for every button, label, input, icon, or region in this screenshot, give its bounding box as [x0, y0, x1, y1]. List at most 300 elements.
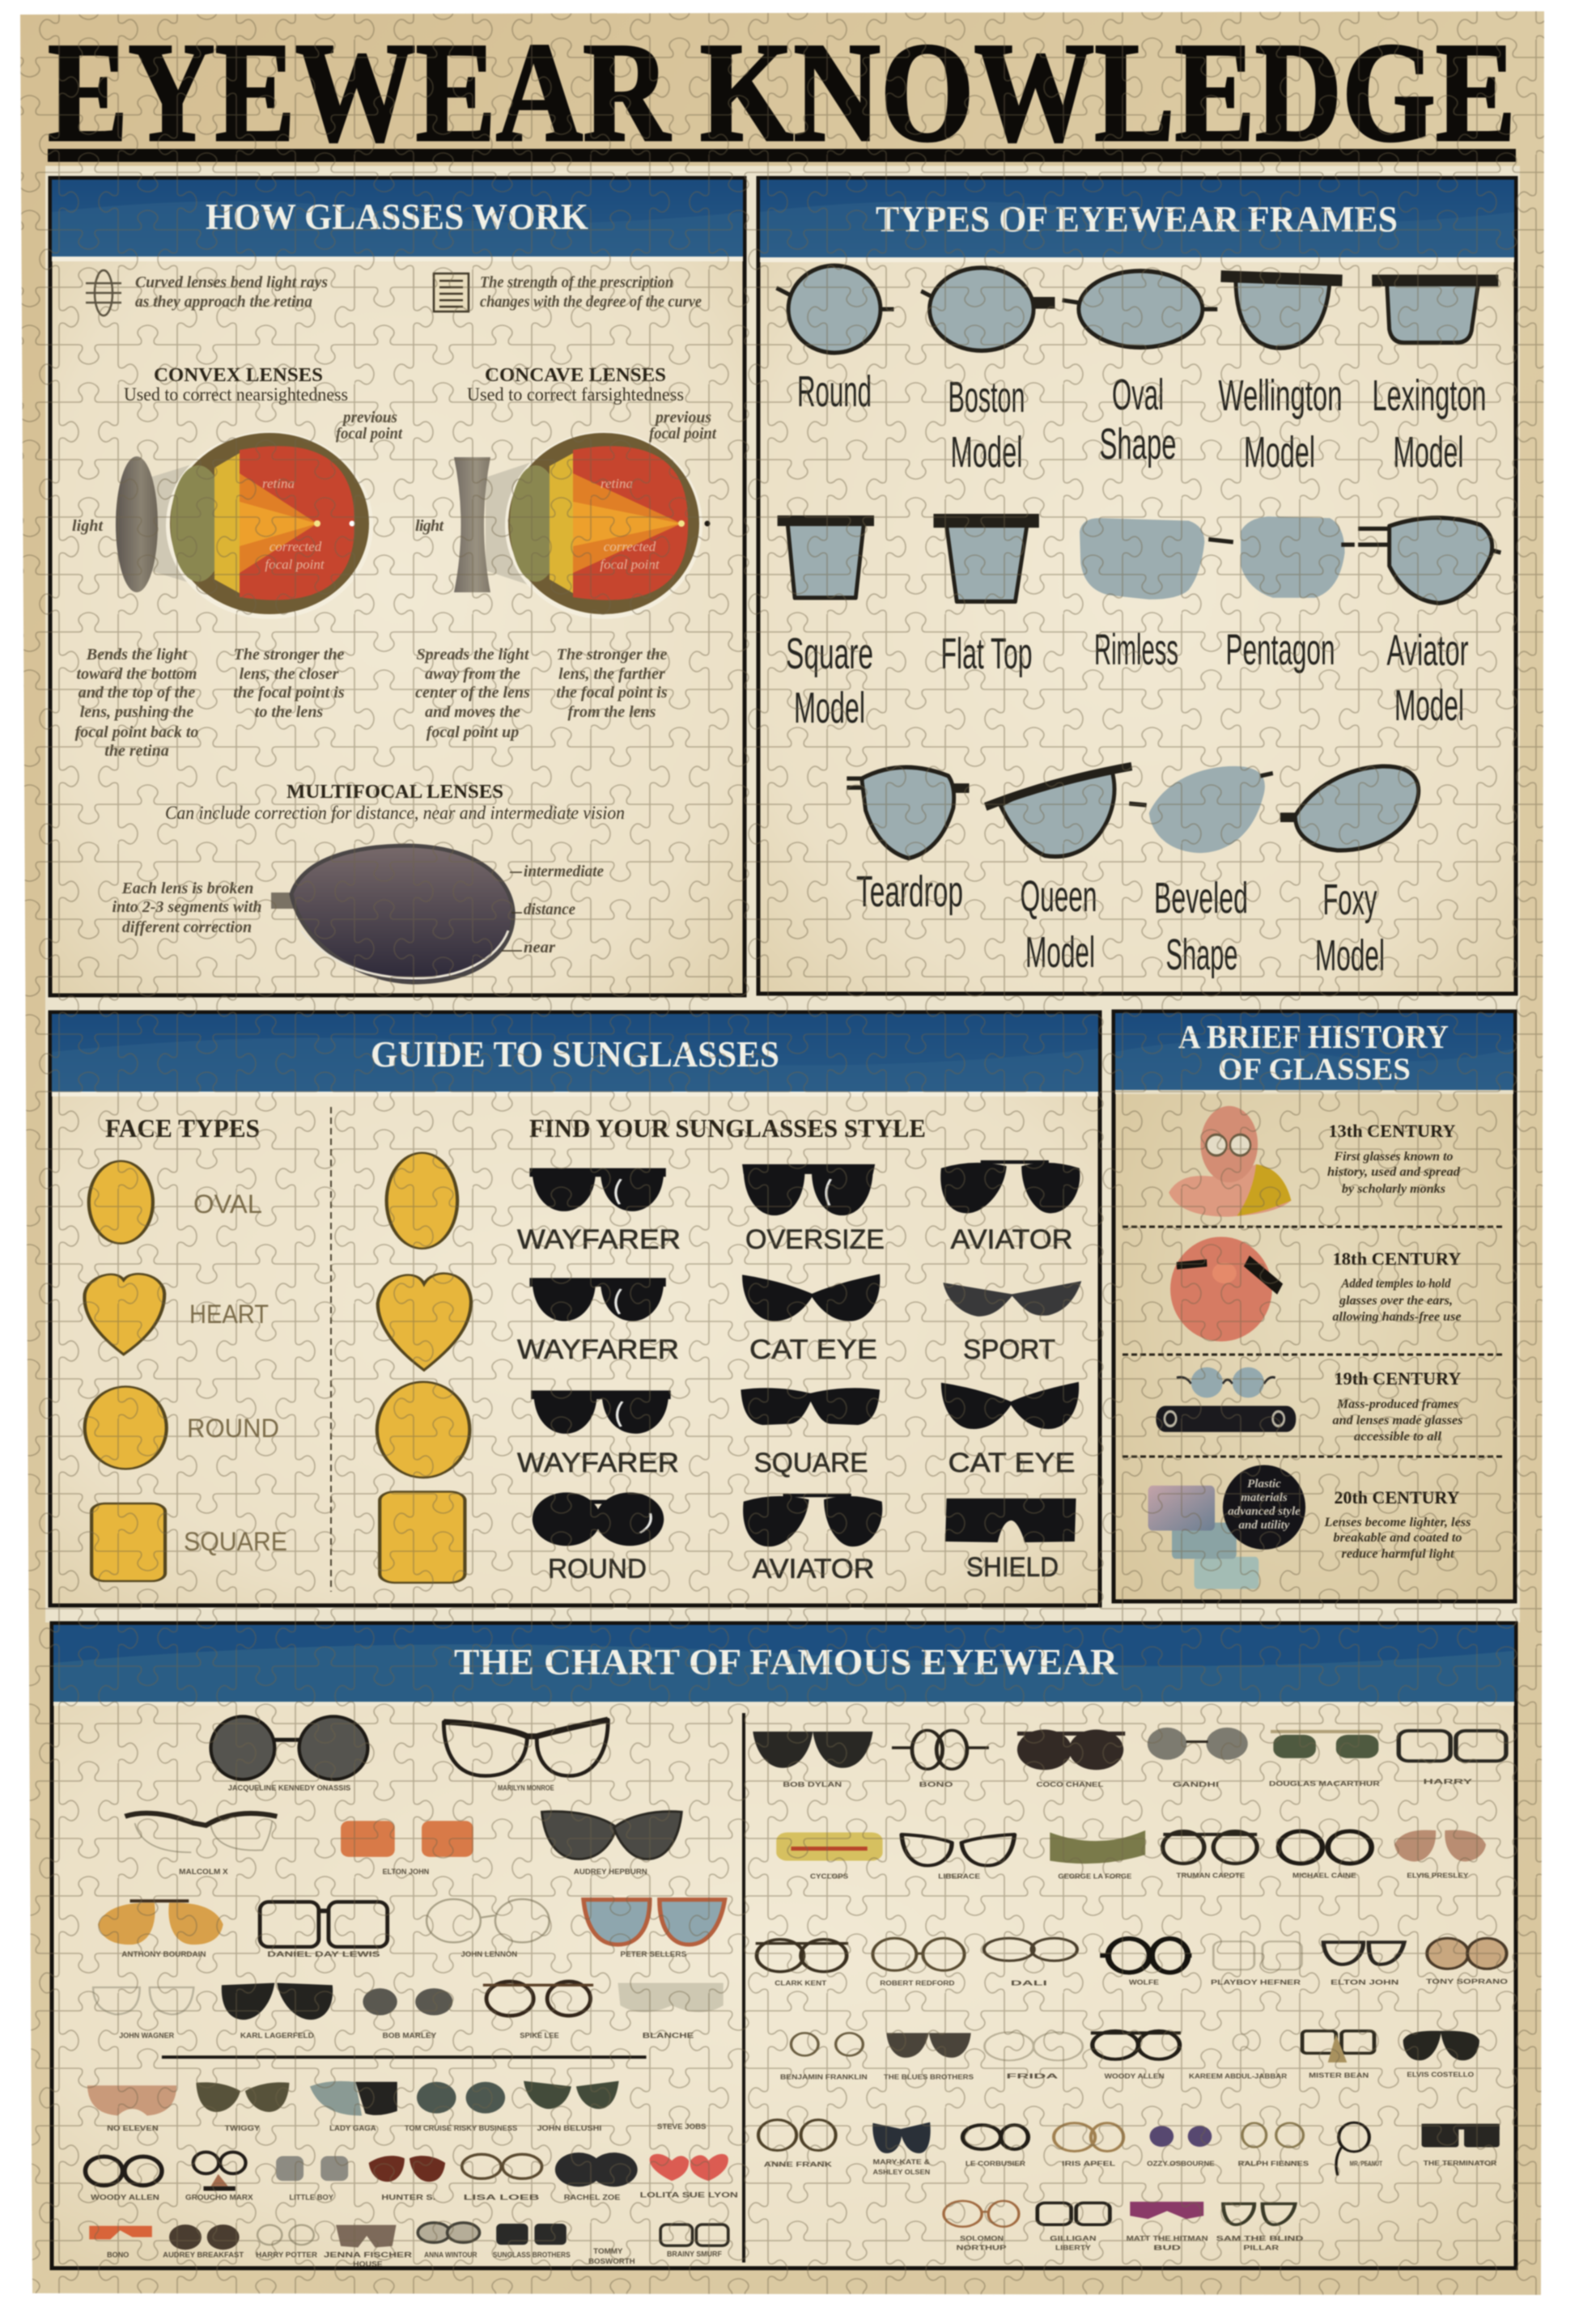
header: types of frames [760, 180, 1514, 262]
label: amber tinted: TONY SOPRANO [1426, 1978, 1508, 1986]
eyewear: leopard: JENNA FISCHER [324, 2251, 412, 2260]
19th century text: Mass-produced frames [1336, 1397, 1458, 1411]
convex lenses heading [124, 365, 348, 405]
eyewear: dark gradient round [555, 2152, 638, 2202]
eyewear: dark red aviator [369, 2156, 445, 2202]
diagram: concave lens eye: previous [654, 409, 711, 426]
19th century text [1332, 1368, 1463, 1444]
20th century text [1323, 1487, 1471, 1561]
header: brief history [1115, 1013, 1513, 1094]
frame names: Model [1394, 681, 1464, 730]
eyewear: frames with nose [1302, 2031, 1374, 2080]
frame: pentagon [1241, 516, 1355, 598]
eyewear: brown round A: CLARK KENT [775, 1980, 827, 1987]
eyewear: gray round: GANDHI [1173, 1781, 1219, 1789]
eyewear: small round copper: NORTHUP [956, 2245, 1007, 2252]
eyewear: olive rectangles [1216, 2203, 1303, 2252]
eyewear: purple dots: OZZY OSBOURNE [1147, 2161, 1215, 2168]
text: concave explanation 2: from the lens [568, 703, 656, 721]
20th century text: Lenses become lighter, less [1323, 1516, 1471, 1529]
frame names: Oval [1112, 371, 1164, 419]
eyewear: black rectangles small: LIBERTY [1055, 2245, 1091, 2252]
frames drawn in one coordinate group [776, 265, 1500, 859]
frame names: Flat Top [940, 630, 1033, 678]
eyewear: small round copper: SOLOMON [960, 2235, 1004, 2243]
eyewear: thick round: MICHAEL CAINE [1292, 1872, 1356, 1880]
eyewear: small dark round [363, 1988, 452, 2040]
eyewear: dark brown: AUDREY BREAKFAST [163, 2251, 244, 2260]
eyewear: dark bat [872, 2123, 931, 2176]
eyewear: green clubmaster [524, 2081, 619, 2133]
eyewear: dark red aviator: HUNTER S. [381, 2194, 435, 2202]
frame names: Round [797, 367, 872, 416]
eyewear: magenta [1127, 2202, 1208, 2252]
header: guide to sunglasses: GUIDE TO SUNGLASSES [371, 1033, 779, 1075]
eyewear: gray round [1148, 1728, 1248, 1789]
eyewear: browline: MALCOLM X [179, 1868, 228, 1877]
diagram: concave lens eye: focal point [600, 557, 660, 572]
style labels: SQUARE [754, 1448, 868, 1478]
eyewear: browline [125, 1813, 277, 1877]
18th century text: Added temples to hold [1341, 1277, 1451, 1291]
diagram: convex lens eye: previous [342, 409, 397, 426]
20th century text: 20th CENTURY [1334, 1487, 1460, 1508]
eyewear: flat ovals [984, 1938, 1077, 1987]
eyewear: thick round black: WOODY ALLEN [91, 2194, 159, 2202]
13th century text [1327, 1121, 1461, 1196]
large face: heart [378, 1274, 471, 1370]
eyewear: orange square lenses: ELTON JOHN [383, 1868, 429, 1877]
eyewear: tan aviators: ANTHONY BOURDAIN [121, 1951, 206, 1959]
eyewear: thick black round [1100, 1939, 1191, 1987]
eyewear: mottled and dark: LADY GAGA [329, 2124, 376, 2133]
eyewear: clear cat: LIBERACE [938, 1873, 980, 1881]
eyewear: leopard: HOUSE [353, 2260, 383, 2269]
frame names: Lexington [1373, 371, 1486, 420]
style labels: WAYFARER [517, 1334, 679, 1365]
eyewear: yellow visor: CYCLOPS [810, 1873, 848, 1881]
eyewear: dark square [884, 2033, 974, 2081]
eyewear: tan round small [1238, 2123, 1309, 2168]
panel: guide to sunglasses [50, 1012, 1100, 1605]
frame names: Queen [1020, 872, 1097, 921]
eyewear: round black: WOODY ALLEN [1105, 2073, 1165, 2080]
eyewear: round black [1091, 2031, 1181, 2080]
eyewear: black rectangles small: GILLIGAN [1050, 2235, 1097, 2243]
text: multifocal note: Each lens is broken [121, 880, 253, 897]
diagram: concave lens eye: focal point [649, 425, 717, 443]
eyewear: pink tan [87, 2085, 176, 2133]
eyewear: dark cat small: ELTON JOHN [1330, 1979, 1398, 1987]
eyewear: olive band: GEORGE LA FORGE [1058, 1873, 1132, 1881]
eyewear: round tortoise: SPIKE LEE [520, 2032, 559, 2040]
frame names: Square [786, 630, 873, 678]
eyewear: tan round small: RALPH FIENNES [1238, 2161, 1309, 2168]
frame names: Wellington [1219, 371, 1342, 420]
eyewear: thin clear [462, 2154, 542, 2202]
eyewear: brown round C: ANNE FRANK [764, 2161, 833, 2169]
small face: square [91, 1503, 165, 1581]
diagram: convex lens eye: light [72, 517, 104, 535]
frame: foxy [1280, 766, 1419, 850]
face labels: OVAL [193, 1190, 262, 1219]
13th century text: by scholarly monks [1342, 1182, 1445, 1196]
eyewear: thick round black [85, 2156, 162, 2202]
frame: aviator [1358, 518, 1500, 603]
diagram: convex lens eye: focal point [265, 557, 325, 572]
eyewear: large square frames: DANIEL DAY LEWIS [267, 1951, 380, 1959]
text: convex explanation 1: the retina [104, 742, 169, 760]
sunglasses: square [741, 1388, 880, 1425]
circle callout text [1228, 1478, 1301, 1532]
eyewear: green clubmaster: JOHN BELUSHI [537, 2124, 602, 2133]
eyewear: faint tiny: KAREEM ABDUL-JABBAR [1189, 2073, 1288, 2080]
frame names: Model [1244, 428, 1315, 477]
multifocal lenses heading: Can include correction for distance, near and intermediate vision [165, 803, 625, 823]
frame names: Beveled [1154, 874, 1248, 922]
eyewear: dark gradient round: RACHEL ZOE [564, 2194, 621, 2202]
19th century text: 19th CENTURY [1334, 1368, 1462, 1389]
eyewear: faint clear: FRIDA [1006, 2073, 1058, 2080]
label: invisible frames: STEVE JOBS [657, 2123, 707, 2131]
eyewear: round thin [1163, 1831, 1257, 1880]
eyewear: monocle [1336, 2123, 1383, 2175]
frame names: Teardrop [856, 867, 963, 916]
circle callout text: advanced style [1228, 1505, 1301, 1518]
eyewear: faint rectangles [1211, 1941, 1301, 1987]
eyewear: olive wayfarer [196, 2082, 289, 2133]
face labels: SQUARE [184, 1527, 287, 1556]
shapes and sunglasses drawing group [84, 1153, 1081, 1583]
illustration: monk with glasses [1169, 1106, 1291, 1217]
eyewear: amber rim [1054, 2123, 1123, 2168]
eyewear: faint rims [93, 1987, 193, 2014]
style labels: AVIATOR [753, 1554, 874, 1584]
text: convex explanation 1: toward the bottom [77, 665, 197, 683]
concave lenses heading [467, 365, 684, 405]
eyewear: large round sunglasses [211, 1716, 367, 1792]
frame names: Rimless [1094, 626, 1178, 674]
eyewear: orange small: BONO [107, 2251, 129, 2260]
eyewear: small round [963, 2125, 1028, 2168]
diagram: convex lens eye: corrected [269, 539, 322, 554]
frame names: Aviator [1387, 626, 1469, 675]
eyewear: groucho: GROUCHO MARX [185, 2194, 253, 2202]
eyewear: faint tiny [1189, 2034, 1288, 2080]
frame: queen [986, 766, 1131, 857]
eyewear: gray framed [418, 2223, 480, 2242]
eyewear: leopard [324, 2225, 412, 2269]
circle callout text: and utility [1239, 1519, 1290, 1532]
13th century text: First glasses known to [1334, 1150, 1454, 1164]
style labels: OVERSIZE [745, 1224, 885, 1255]
eyewear: faint small round [256, 2225, 317, 2260]
eyewear: black small square [493, 2224, 571, 2260]
large face: square [380, 1491, 465, 1583]
text: concave explanation 2 [556, 646, 668, 721]
eyewear: clear rectangles [660, 2224, 728, 2258]
diagram: convex lens eye: focal point [336, 425, 403, 443]
circle callout text: materials [1241, 1491, 1288, 1504]
style labels: CAT EYE [749, 1334, 877, 1365]
eyewear: gray squares [276, 2156, 348, 2202]
frame: oval [1063, 271, 1217, 347]
illustration: 20th century lens swatches [1148, 1465, 1305, 1589]
text: convex explanation 1: Bends the light [86, 646, 189, 664]
style labels: WAYFARER [517, 1224, 681, 1255]
eyewear: small round: LE CORBUSIER [966, 2161, 1026, 2168]
eyewear: faint small round: HARRY POTTER [256, 2251, 317, 2260]
eyewear: dark bat: MARY-KATE & [872, 2159, 930, 2166]
diagram: multifocal lens: distance [524, 901, 575, 918]
small face: oval [89, 1161, 153, 1244]
eyewear: black aviators: KARL LAGERFELD [240, 2032, 314, 2040]
eyewear: dark round [1017, 1729, 1125, 1789]
frame names: Shape [1099, 420, 1177, 469]
20th century text: reduce harmful light [1342, 1547, 1454, 1561]
eyewear: black wayfarer [753, 1732, 872, 1789]
frame: round [776, 265, 893, 353]
sunglasses: oversize [742, 1164, 875, 1215]
eyewear: round tortoise [483, 1982, 593, 2040]
eyewear: large round sunglasses: JACQUELINE KENNEDY ONASSIS [228, 1784, 351, 1792]
eyewear: green round [405, 2082, 518, 2133]
text: convex explanation 2: the focal point is [233, 684, 345, 702]
eyewear: thin clear: LISA LOEB [464, 2194, 539, 2202]
icon: curved lens [86, 270, 121, 316]
text: concave explanation 1: center of the lens [415, 684, 530, 702]
18th century text: allowing hands-free use [1332, 1310, 1462, 1324]
sunglasses: sport [943, 1281, 1081, 1317]
text: prescription strength [480, 274, 702, 311]
eyewear: amber rim: IRIS APFEL [1062, 2161, 1115, 2168]
text: curved lenses [135, 274, 328, 311]
eyewear: small dark round: BOB MARLEY [383, 2032, 437, 2040]
text: concave explanation 2: lens, the farther [558, 665, 665, 683]
eyewear: tan aviators [98, 1901, 223, 1959]
frame names: Model [794, 684, 865, 732]
label: john lennon: JOHN LENNON [461, 1951, 517, 1959]
sunglasses: wayfarer row 3 [531, 1390, 671, 1434]
eyewear: orange square lenses [341, 1821, 473, 1877]
style labels: CAT EYE [949, 1448, 1075, 1478]
text: convex explanation 1: focal point back to [75, 723, 198, 741]
eyewear: brown round B [872, 1938, 965, 1987]
eyewear: flat ovals: DALI [1011, 1980, 1047, 1987]
eyewear: dark cat small [1323, 1942, 1404, 1987]
eyewear: tan aviator [1394, 1830, 1486, 1880]
label: gray framed: ANNA WINTOUR [424, 2251, 477, 2260]
text: curved lenses: Curved lenses bend light rays [135, 274, 328, 291]
eyewear: green tint: DOUGLAS MACARTHUR [1269, 1780, 1381, 1788]
header: brief history: A BRIEF HISTORY [1178, 1018, 1449, 1055]
circle callout text: Plastic [1247, 1478, 1281, 1491]
sunglasses: cat eye row 3 [941, 1382, 1079, 1429]
text: convex explanation 2: to the lens [255, 703, 323, 721]
eyewear: black small square: SUNGLASS BROTHERS [493, 2251, 571, 2260]
eyewear: dark square: THE BLUES BROTHERS [884, 2074, 974, 2081]
eyewear: thick round [1279, 1831, 1372, 1880]
frame names: Shape [1165, 931, 1238, 979]
text: convex explanation 2: The stronger the [234, 646, 344, 664]
text: convex explanation 1: lens, pushing the [80, 703, 193, 721]
frame names: Pentagon [1225, 626, 1335, 674]
header: chart of famous eyewear: THE CHART OF FAMOUS EYEWEAR [454, 1641, 1118, 1682]
eyewear: black rectangular outline: HARRY [1424, 1779, 1473, 1786]
eyewear: tan aviator: ELVIS PRESLEY [1407, 1872, 1469, 1880]
frame: rimless [1080, 518, 1233, 600]
eyewear: black rectangles small [1038, 2203, 1110, 2252]
eyewear: amber tinted [1427, 1938, 1507, 1969]
sunglasses: wayfarer row 2 [529, 1278, 666, 1321]
eyewear: frames with nose: MISTER BEAN [1309, 2072, 1369, 2080]
face labels: HEART [189, 1300, 269, 1329]
label: john wagner: JOHN WAGNER [119, 2032, 174, 2040]
illustration: head with temples [1170, 1236, 1280, 1342]
text: convex explanation 2: lens, the closer [240, 665, 339, 683]
frame names [786, 367, 1486, 980]
eyewear: magenta: BUD [1153, 2245, 1181, 2252]
text: prescription strength: The strength of the prescription [480, 274, 673, 291]
eyewear: red and blue wayfarers [584, 1900, 725, 1959]
panel: types of eyewear frames [758, 178, 1516, 994]
eyewear: black blob sunglasses: ELVIS COSTELLO [1407, 2072, 1474, 2079]
18th century text: glasses over the ears, [1339, 1294, 1453, 1308]
icon: prescription document [434, 274, 469, 312]
eyewear: dark round: COCO CHANEL [1036, 1781, 1103, 1789]
multifocal lenses heading [165, 782, 625, 823]
header: chart of famous eyewear [53, 1625, 1514, 1706]
text: concave explanation 1 [415, 646, 530, 741]
convex lenses heading: Used to correct nearsightedness [124, 384, 348, 405]
13th century text: history, used and spread [1327, 1165, 1461, 1179]
eyewear: yellow visor [776, 1833, 883, 1881]
style labels: ROUND [548, 1554, 647, 1584]
left eyewear chart [85, 1716, 738, 2269]
right eyewear chart [753, 1728, 1508, 2252]
eyewear: pale rectangle [617, 1983, 724, 2040]
face labels: ROUND [187, 1414, 279, 1443]
style labels: AVIATOR [950, 1224, 1073, 1255]
text: concave explanation 2: the focal point is [556, 684, 668, 702]
eyewear: black wayfarer: BOB DYLAN [783, 1781, 842, 1789]
eyewear: dark cat eye sunglasses [542, 1812, 681, 1860]
text: concave explanation 1: away from the [425, 665, 520, 683]
eyewear: clear ovals [892, 1730, 989, 1789]
text: convex explanation 2 [233, 646, 345, 721]
label: two-line stub [588, 2248, 635, 2266]
diagram: concave lens eye: retina [601, 476, 633, 491]
text: multifocal note [112, 880, 262, 936]
text: concave explanation 1: focal point up [427, 723, 519, 741]
diagram: multifocal lens: intermediate [524, 863, 604, 880]
text: concave explanation 2: The stronger the [557, 646, 667, 664]
frame names: Model [1394, 428, 1463, 477]
eyewear: green round: TOM CRUISE RISKY BUSINESS [405, 2124, 518, 2133]
multifocal lenses heading: MULTIFOCAL LENSES [286, 782, 503, 803]
diagram: convex lens eye [72, 409, 403, 619]
eyewear: gray squares: LITTLE BOY [289, 2194, 333, 2202]
eyewear: pale rectangle: BLANCHE [643, 2032, 694, 2040]
eyewear: olive rectangles: PILLAR [1243, 2245, 1280, 2252]
style labels: SHIELD [966, 1552, 1059, 1583]
large face: oval [387, 1153, 457, 1249]
eyewear: olive rectangles: SAM THE BLIND [1216, 2235, 1303, 2243]
frame: beveled [1129, 766, 1273, 853]
heading: find your sunglasses style: FIND YOUR SUNGLASSES STYLE [529, 1113, 926, 1143]
eyewear: brown round C [758, 2120, 836, 2169]
text: concave explanation 1: Spreads the light [417, 646, 530, 664]
eyewear: brown round B: ROBERT REDFORD [880, 1980, 954, 1987]
eyewear: dark bat: ASHLEY OLSEN [872, 2169, 930, 2176]
eyewear: olive wayfarer: TWIGGY [225, 2124, 261, 2133]
text: multifocal note: into 2-3 segments with [112, 898, 262, 916]
eyewear: faint small round [780, 2033, 868, 2081]
panel: brief history of glasses [1114, 1011, 1515, 1601]
sunglasses: aviator [940, 1160, 1080, 1213]
19th century text: and lenses made glasses [1332, 1414, 1463, 1427]
diagram: multifocal lens [271, 846, 604, 982]
large face: round [377, 1382, 469, 1478]
frame names: Model [950, 428, 1023, 477]
18th century text [1332, 1249, 1462, 1324]
frame: square [778, 521, 874, 598]
13th century text: 13th CENTURY [1329, 1121, 1456, 1141]
label: two-line stub: TOMMY [593, 2248, 623, 2256]
eyewear: olive band [1050, 1830, 1145, 1881]
eyewear: pink tan: NO ELEVEN [107, 2124, 159, 2133]
illustration: 19th century glasses and factory belt [1156, 1368, 1296, 1432]
panel: how glasses work [50, 178, 745, 995]
eyewear: black blob sunglasses [1403, 2031, 1479, 2079]
header: how glasses work: HOW GLASSES WORK [206, 196, 588, 237]
header: guide to sunglasses [52, 1014, 1098, 1096]
frame names: Model [1025, 928, 1095, 977]
eyewear: red hearts: LOLITA SUE LYON [640, 2191, 738, 2200]
eyewear: large square frames [260, 1902, 388, 1959]
eyewear: faint rectangles: PLAYBOY HEFNER [1211, 1979, 1301, 1987]
text: concave explanation 1: and moves the [425, 703, 520, 721]
text: convex explanation 1 [75, 646, 198, 760]
eyewear: groucho [185, 2152, 253, 2202]
eyewear: black square shades: THE TERMINATOR [1424, 2160, 1497, 2167]
small face: heart [84, 1274, 164, 1355]
eyewear: faint small round: BENJAMIN FRANKLIN [780, 2074, 868, 2081]
diagram: concave lens eye: light [415, 517, 444, 535]
face labels [184, 1190, 287, 1556]
frame: lexington [1372, 281, 1498, 342]
text: curved lenses: as they approach the retina [135, 293, 312, 311]
18th century text: 18th CENTURY [1332, 1249, 1462, 1269]
eyewear: red hearts [640, 2154, 738, 2200]
eyewear: clear ovals: BONO [919, 1781, 953, 1789]
history illustrations group [1148, 1106, 1305, 1589]
style labels: WAYFARER [517, 1448, 679, 1478]
eyewear: small round copper [944, 2201, 1019, 2252]
eyewear: clear cat [902, 1834, 1015, 1881]
diagram: concave lens eye: corrected [604, 539, 656, 554]
eyewear: clear rectangles: BRAINY SMURF [667, 2250, 722, 2258]
frame: teardrop [847, 767, 970, 859]
eyewear: round thin: TRUMAN CAPOTE [1177, 1872, 1246, 1880]
header: how glasses work [52, 180, 743, 261]
eyewear: green tint [1269, 1732, 1381, 1788]
concave lenses heading: CONCAVE LENSES [485, 365, 666, 386]
frame: wellington [1221, 276, 1343, 348]
eyewear: magenta: MATT THE HITMAN [1127, 2235, 1208, 2243]
header: types of frames: TYPES OF EYEWEAR FRAMES [876, 198, 1398, 240]
text: multifocal note: different correction [122, 918, 252, 936]
